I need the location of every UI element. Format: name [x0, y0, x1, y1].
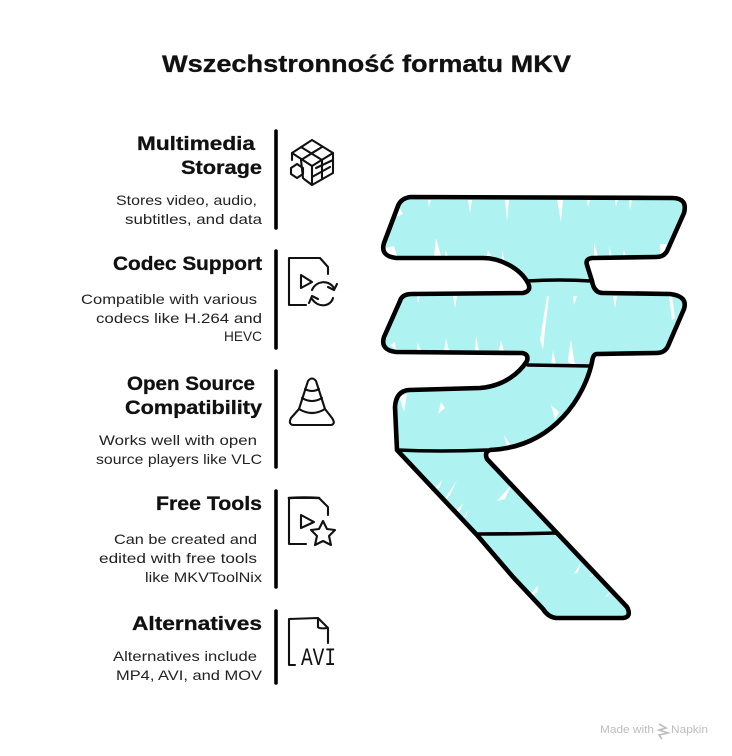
description: MP4, AVI, and MOV — [116, 667, 263, 683]
description — [116, 192, 262, 227]
heading: Compatibility — [125, 398, 262, 419]
description: Compatible with various — [81, 291, 257, 307]
icon: VLC cone — [290, 378, 334, 425]
white ice shards — [385, 200, 675, 597]
item: Alternatives — [113, 611, 336, 683]
vertical bar — [274, 491, 278, 587]
title: Wszechstronność formatu MKV — [162, 51, 571, 78]
icon: video file with star — [289, 498, 335, 545]
vertical bar — [274, 611, 278, 683]
rupee segment dividers — [397, 280, 591, 534]
heading: Multimedia — [137, 134, 256, 155]
heading — [125, 374, 262, 419]
description: HEVC — [224, 328, 262, 344]
footer: Made with Napkin — [600, 724, 708, 739]
item: Multimedia Storage — [116, 131, 333, 228]
footer: Made with Napkin: Napkin — [671, 724, 708, 736]
heading: Free Tools — [156, 494, 262, 515]
heading: Alternatives — [132, 614, 262, 635]
icon: video file with refresh arrows — [289, 258, 337, 305]
heading — [137, 134, 262, 179]
description: Can be created and — [114, 531, 257, 547]
item: Codec Support — [81, 251, 337, 348]
rupee fill — [383, 197, 685, 618]
vertical bar — [274, 131, 278, 228]
rupee outline — [383, 197, 685, 618]
description — [81, 291, 262, 344]
footer: Made with Napkin: Made with — [600, 724, 654, 736]
description: subtitles, and data — [125, 211, 262, 227]
item: Open Source Compatibility — [96, 371, 334, 467]
icon: AVI file — [289, 618, 336, 673]
item: Free Tools — [99, 491, 335, 587]
description: Alternatives include — [113, 648, 257, 664]
description: Stores video, audio, — [116, 192, 257, 208]
icon: AVI file: AVI — [301, 644, 336, 673]
vertical bar — [274, 251, 278, 348]
heading: Open Source — [127, 374, 255, 395]
rupee symbol illustration — [383, 197, 685, 618]
description — [99, 531, 262, 585]
description: source players like VLC — [96, 451, 262, 467]
description: Works well with open — [99, 432, 257, 448]
description — [96, 432, 262, 467]
heading: Codec Support — [113, 254, 263, 275]
description: like MKVToolNix — [145, 569, 262, 585]
vertical bar — [274, 371, 278, 467]
icon: Napkin logo — [659, 724, 668, 739]
description: codecs like H.264 and — [96, 310, 262, 326]
icon: cube — [291, 140, 333, 185]
description: edited with free tools — [99, 550, 257, 566]
heading: Storage — [181, 158, 262, 179]
description — [113, 648, 263, 683]
